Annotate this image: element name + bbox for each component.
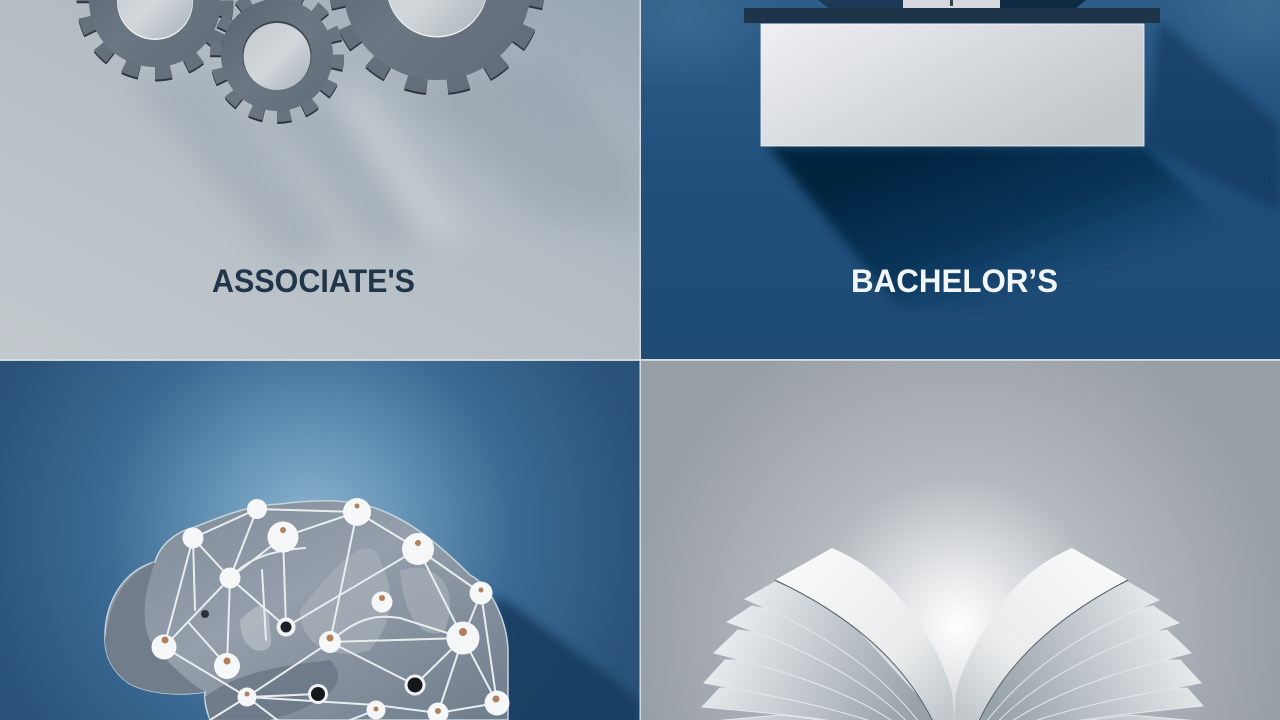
icon: podium xyxy=(744,0,1160,146)
podium top xyxy=(818,0,905,8)
brain silhouette xyxy=(105,501,508,720)
heading: ASSOCIATE'S: ASSOCIATE'S xyxy=(212,263,415,299)
panel: Master's brain xyxy=(0,361,640,720)
podium box xyxy=(761,24,1144,146)
heading: BACHELOR'S: BACHELOR’S xyxy=(851,263,1058,299)
brain folds xyxy=(105,562,205,694)
top page right xyxy=(954,548,1128,720)
dark nodes xyxy=(201,610,426,704)
node centres xyxy=(162,504,500,714)
gear 3 xyxy=(337,0,537,88)
panel: Bachelor's xyxy=(630,0,1280,359)
icon: brain network xyxy=(105,498,509,720)
top page left xyxy=(775,548,955,720)
gear 1 xyxy=(84,0,226,74)
fanned pages left xyxy=(702,582,950,720)
fanned pages right xyxy=(980,582,1204,720)
panel: Doctorate book xyxy=(641,361,1280,720)
panel dividers xyxy=(640,0,641,720)
gear 2 xyxy=(216,0,338,118)
network nodes xyxy=(152,498,510,720)
icon: open book xyxy=(702,548,1210,720)
icon: gears xyxy=(84,0,537,118)
panel: Associate's xyxy=(0,0,640,359)
podium shelf xyxy=(744,8,1160,23)
network links xyxy=(164,509,497,720)
